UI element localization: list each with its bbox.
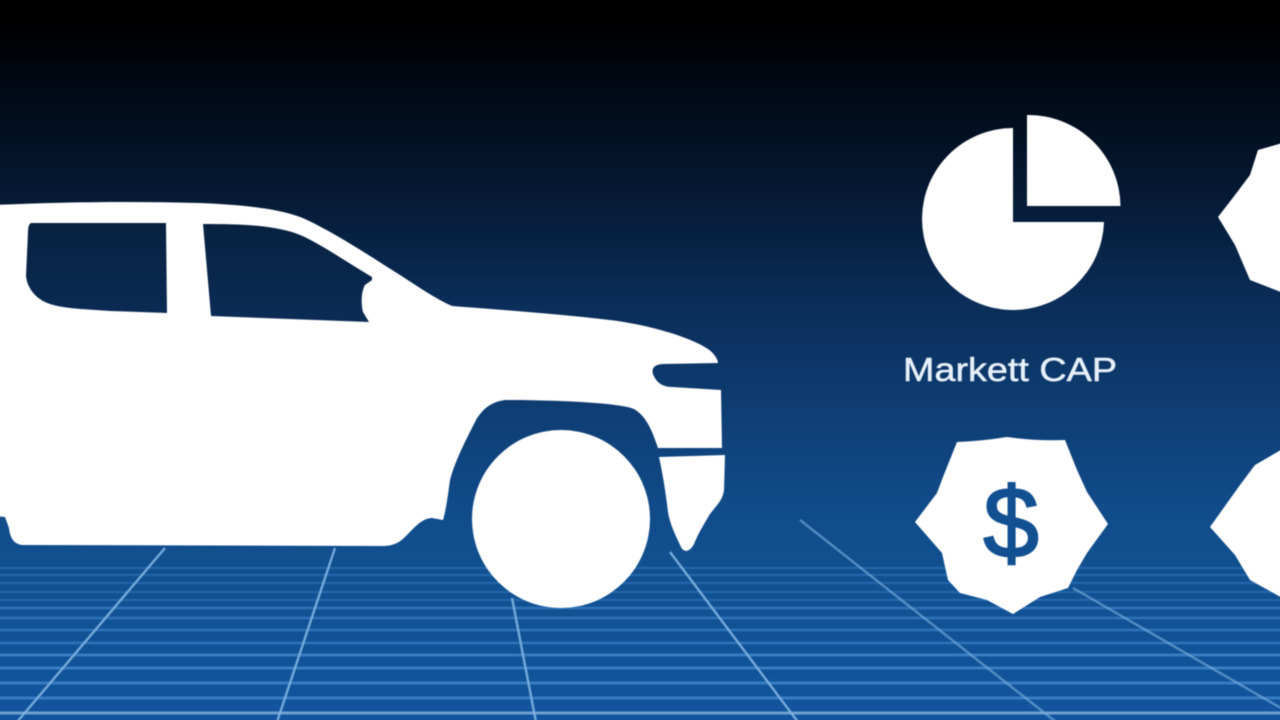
truck front window (203, 224, 372, 322)
badge shape (915, 437, 1108, 614)
truck body (0, 202, 722, 546)
truck front wheel (472, 430, 650, 608)
icon: pickup truck silhouette (0, 202, 725, 608)
icon: partial badge lower right (1210, 447, 1280, 600)
icon: dollar badge (915, 437, 1108, 614)
dollar sign: $ (983, 467, 1039, 579)
pie main segment (922, 128, 1104, 310)
truck rear window (26, 223, 167, 313)
label: market cap: Markett CAP (903, 351, 1117, 388)
truck front bumper (659, 455, 725, 551)
icon: partial badge upper right (1218, 142, 1280, 294)
pie detached slice (1027, 115, 1120, 206)
icon: market cap pie chart (922, 115, 1120, 310)
perspective grid floor (0, 520, 1280, 720)
